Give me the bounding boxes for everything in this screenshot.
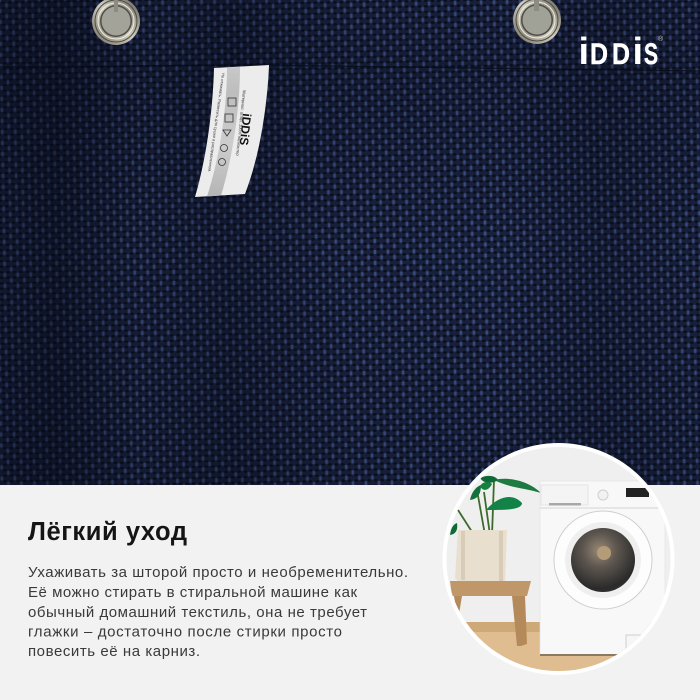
canvas bag: [455, 530, 507, 581]
label washing text: Не отжимать. Развесить для сушки в расправленном.: [207, 73, 226, 173]
bottom text panel: [0, 485, 700, 700]
brand logo: iDDiS: i: [632, 31, 643, 73]
body text: [28, 564, 408, 660]
wooden stool: [450, 581, 531, 646]
circular photo: washing machine: [440, 440, 680, 680]
washing machine: [540, 481, 665, 656]
grommet: right: [513, 0, 561, 44]
body text: повесить её на карниз.: [28, 643, 200, 660]
heading: Лёгкий уход: [28, 518, 187, 546]
brand logo: iDDiS: D: [590, 38, 608, 71]
floor and baseboard: [466, 622, 651, 671]
brand logo: iDDiS: S: [644, 38, 658, 71]
brand logo: iDDiS: i: [578, 31, 589, 73]
label material text: Материал: штор, 100% полиэстер: [235, 90, 247, 157]
body text: Её можно стирать в стиральной машине как: [28, 584, 357, 601]
brand logo: iDDiS: ®: [658, 35, 664, 43]
brand logo: iDDiS: [578, 31, 664, 73]
care label sewn on the curtain: [195, 65, 269, 197]
fabric background photo: [0, 0, 700, 486]
plant: [450, 476, 541, 535]
label washing care symbols: [218, 98, 236, 166]
body text: глажки – достаточно после стирки просто: [28, 624, 342, 640]
grommet: left: [92, 0, 140, 45]
body text: обычный домашний текстиль, она не требует: [28, 604, 367, 621]
body text: Ухаживать за шторой просто и необременительно.: [28, 564, 408, 581]
brand logo: iDDiS: D: [612, 38, 630, 71]
label brand name: iDDiS: [237, 113, 254, 146]
